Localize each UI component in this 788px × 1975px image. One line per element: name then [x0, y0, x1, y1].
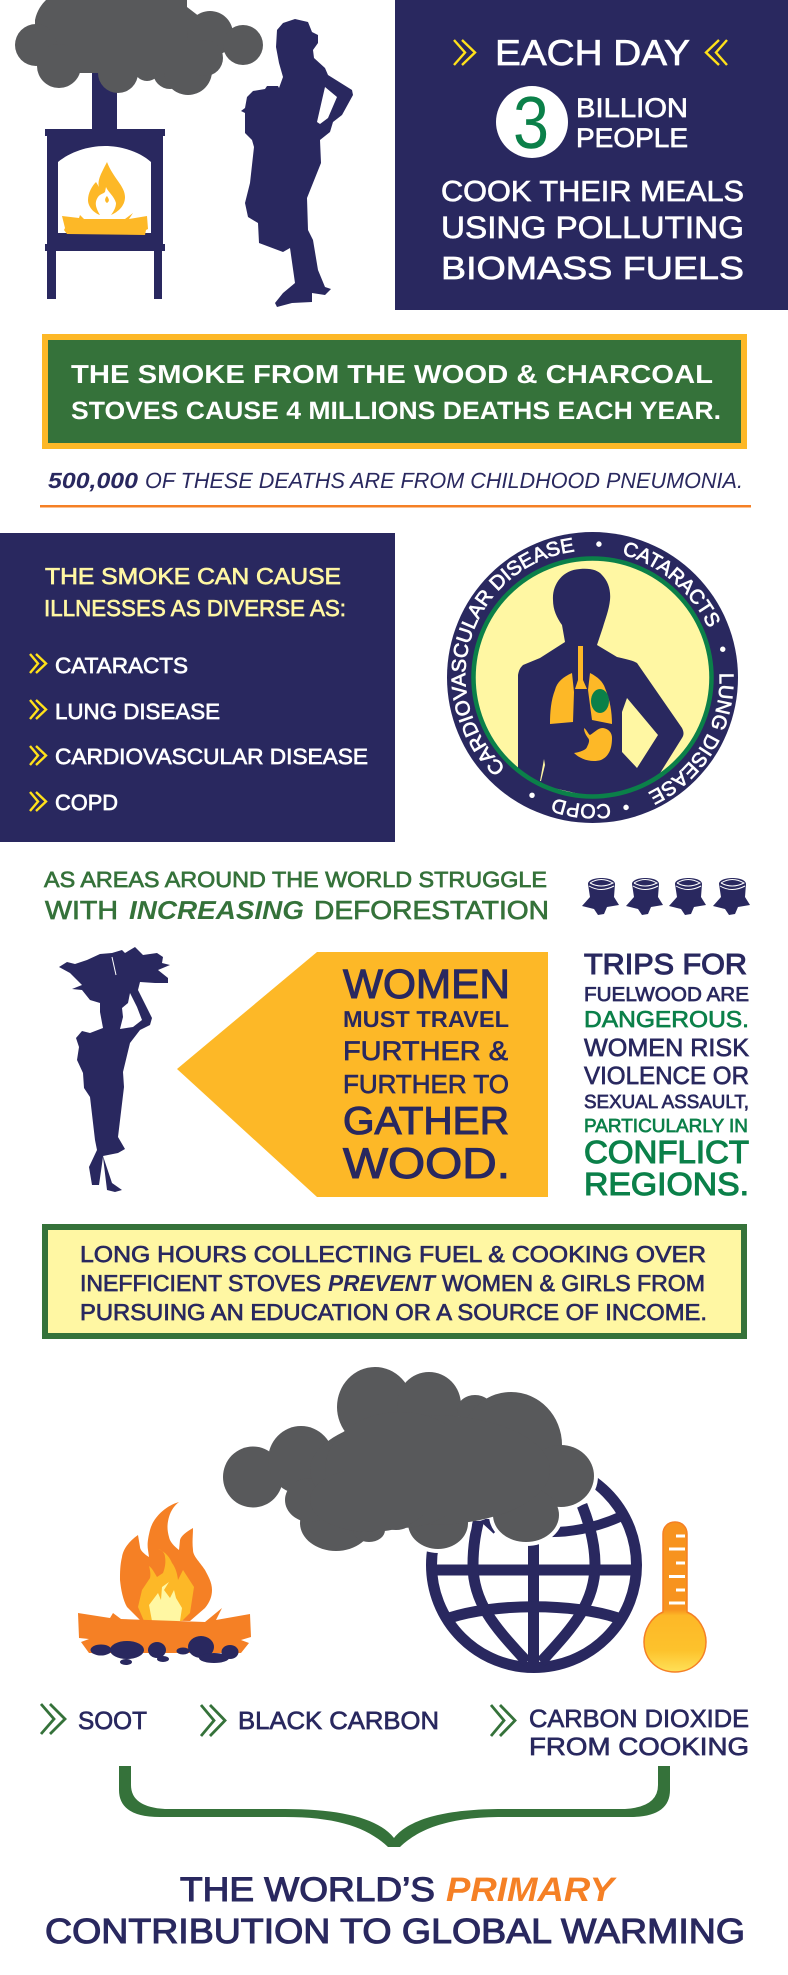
heading: smoke can cause illnesses: ILLNESSES AS DIVERSE AS:	[44, 595, 346, 621]
badge: number three	[496, 81, 568, 164]
label: carbon dioxide from cooking: CARBON DIOXIDE	[529, 1705, 749, 1733]
icon: four tree stumps	[582, 878, 750, 915]
text: trips for fuelwood are dangerous: REGIONS.	[584, 1166, 749, 1202]
label: soot: SOOT	[78, 1707, 147, 1735]
heading: smoke can cause illnesses	[44, 563, 346, 621]
icon: thermometer	[644, 1522, 706, 1672]
callout: long hours collecting fuel	[45, 1227, 744, 1336]
heading: smoke can cause illnesses: THE SMOKE CAN CAUSE	[45, 563, 341, 589]
label: black carbon: BLACK CARBON	[238, 1707, 439, 1735]
logs	[78, 1608, 251, 1653]
list item: lung disease: LUNG DISEASE	[55, 699, 220, 724]
label: soot	[41, 1704, 147, 1735]
icon: left chevrons	[454, 40, 475, 65]
text: trips for fuelwood are dangerous: WOMEN RISK	[584, 1034, 749, 1062]
icon: stove logs	[62, 213, 148, 235]
arrow: women must travel further	[177, 952, 548, 1197]
panel: each day	[395, 0, 788, 310]
heading: deforestation	[44, 867, 549, 925]
icon: woman carrying wood silhouette	[59, 947, 170, 1192]
list item: copd: COPD	[55, 790, 118, 815]
text: trips for fuelwood are dangerous	[584, 949, 749, 1202]
ring labels: CATARACTS	[624, 542, 720, 627]
arrow: women must travel further: GATHER	[343, 1100, 509, 1143]
text: trips for fuelwood are dangerous: SEXUAL ASSAULT,	[584, 1092, 749, 1113]
arrow: women must travel further: FURTHER &	[343, 1036, 508, 1066]
text: cook their meals using polluting biomass fuels: BIOMASS FUELS	[441, 250, 744, 286]
heading: deforestation: AS AREAS AROUND THE WORLD STRUGGLE	[44, 867, 547, 892]
icon: campfire	[78, 1502, 251, 1665]
callout: long hours collecting fuel: LONG HOURS COLLECTING FUEL & COOKING OVER	[80, 1241, 706, 1267]
icon: wood stove	[45, 60, 165, 299]
ring labels: •	[596, 541, 602, 547]
label: carbon dioxide from cooking: FROM COOKING	[529, 1733, 749, 1761]
badge: number three: 3	[513, 81, 549, 164]
organ: heart	[591, 689, 609, 713]
coals	[90, 1636, 238, 1665]
icon: woman with bag silhouette	[241, 19, 353, 307]
text: billion people: BILLION	[576, 93, 688, 123]
list item: cataracts: CATARACTS	[55, 653, 188, 678]
text: trips for fuelwood are dangerous: VIOLENCE OR	[584, 1062, 749, 1090]
heading: world's primary contribution to global warming	[45, 1871, 745, 1951]
text: childhood pneumonia deaths: 500,000	[48, 468, 139, 493]
banner: smoke causes deaths	[45, 337, 744, 446]
arrow: women must travel further: FURTHER TO	[343, 1069, 509, 1099]
callout: long hours collecting fuel: WOMEN & GIRLS FROM	[442, 1270, 705, 1296]
ring labels: CARDIOVASCULAR DISEASE	[451, 538, 574, 774]
brace: green curly bracket	[119, 1766, 670, 1847]
waist gap highlight	[540, 759, 545, 781]
text: trips for fuelwood are dangerous: TRIPS FOR	[584, 949, 747, 981]
heading: world's primary contribution to global warming: CONTRIBUTION TO GLOBAL WARMING	[45, 1912, 745, 1951]
flame outer	[120, 1502, 212, 1621]
ring labels	[451, 538, 734, 819]
ring labels: COPD	[552, 799, 610, 819]
icon: globe	[430, 1462, 638, 1668]
flame inner	[149, 1582, 182, 1621]
banner: smoke causes deaths: THE SMOKE FROM THE WOOD & CHARCOAL	[71, 359, 713, 389]
text: childhood pneumonia deaths: OF THESE DEATHS ARE FROM CHILDHOOD PNEUMONIA.	[145, 468, 743, 493]
ring labels: LUNG DISEASE	[648, 674, 734, 805]
callout: long hours collecting fuel: PREVENT	[328, 1270, 437, 1296]
heading: each day: EACH DAY	[495, 32, 690, 73]
icon: smoke cloud above stove	[15, 0, 263, 95]
person silhouette	[518, 569, 684, 797]
icon: right chevrons	[706, 40, 727, 65]
banner: smoke causes deaths: STOVES CAUSE 4 MILLIONS DEATHS EACH YEAR.	[71, 397, 721, 425]
icon: circular body diagram with illnesses ring	[447, 532, 738, 823]
organ: trachea and lungs	[550, 646, 612, 724]
arrow: women must travel further: WOMEN	[343, 961, 510, 1007]
text: cook their meals using polluting biomass fuels	[441, 176, 744, 286]
heading: deforestation: INCREASING	[129, 895, 304, 925]
text: cook their meals using polluting biomass fuels: COOK THEIR MEALS	[441, 176, 744, 208]
icon: large smoke cloud	[223, 1367, 594, 1551]
ring labels: •	[529, 792, 535, 798]
text: billion people	[576, 93, 688, 153]
text: trips for fuelwood are dangerous: CONFLICT	[584, 1134, 749, 1170]
flame middle	[138, 1549, 194, 1621]
text: cook their meals using polluting biomass fuels: USING POLLUTING	[441, 210, 744, 245]
text: trips for fuelwood are dangerous: DANGEROUS.	[584, 1006, 749, 1032]
callout: long hours collecting fuel: PURSUING AN EDUCATION OR A SOURCE OF INCOME.	[80, 1299, 707, 1325]
callout: long hours collecting fuel: INEFFICIENT STOVES	[80, 1270, 321, 1296]
heading: deforestation: WITH	[45, 895, 118, 925]
text: billion people: PEOPLE	[576, 123, 688, 153]
text: trips for fuelwood are dangerous: PARTICULARLY IN	[584, 1116, 748, 1137]
list item: cardiovascular disease: CARDIOVASCULAR DISEASE	[55, 744, 368, 769]
arrow: women must travel further: WOOD.	[343, 1140, 510, 1188]
icon: stove flame	[88, 162, 125, 215]
label: carbon dioxide from cooking	[491, 1705, 749, 1761]
text: trips for fuelwood are dangerous: FUELWOOD ARE	[584, 984, 749, 1006]
organ: stomach	[574, 728, 612, 761]
panel: illnesses list	[0, 533, 395, 842]
ring labels: •	[623, 804, 629, 810]
heading: deforestation: DEFORESTATION	[314, 895, 549, 925]
heading: world's primary contribution to global warming: THE WORLD’S	[180, 1871, 435, 1909]
heading: world's primary contribution to global warming: PRIMARY	[446, 1871, 618, 1909]
arrow: women must travel further: MUST TRAVEL	[343, 1006, 509, 1032]
ring labels: •	[720, 646, 726, 652]
